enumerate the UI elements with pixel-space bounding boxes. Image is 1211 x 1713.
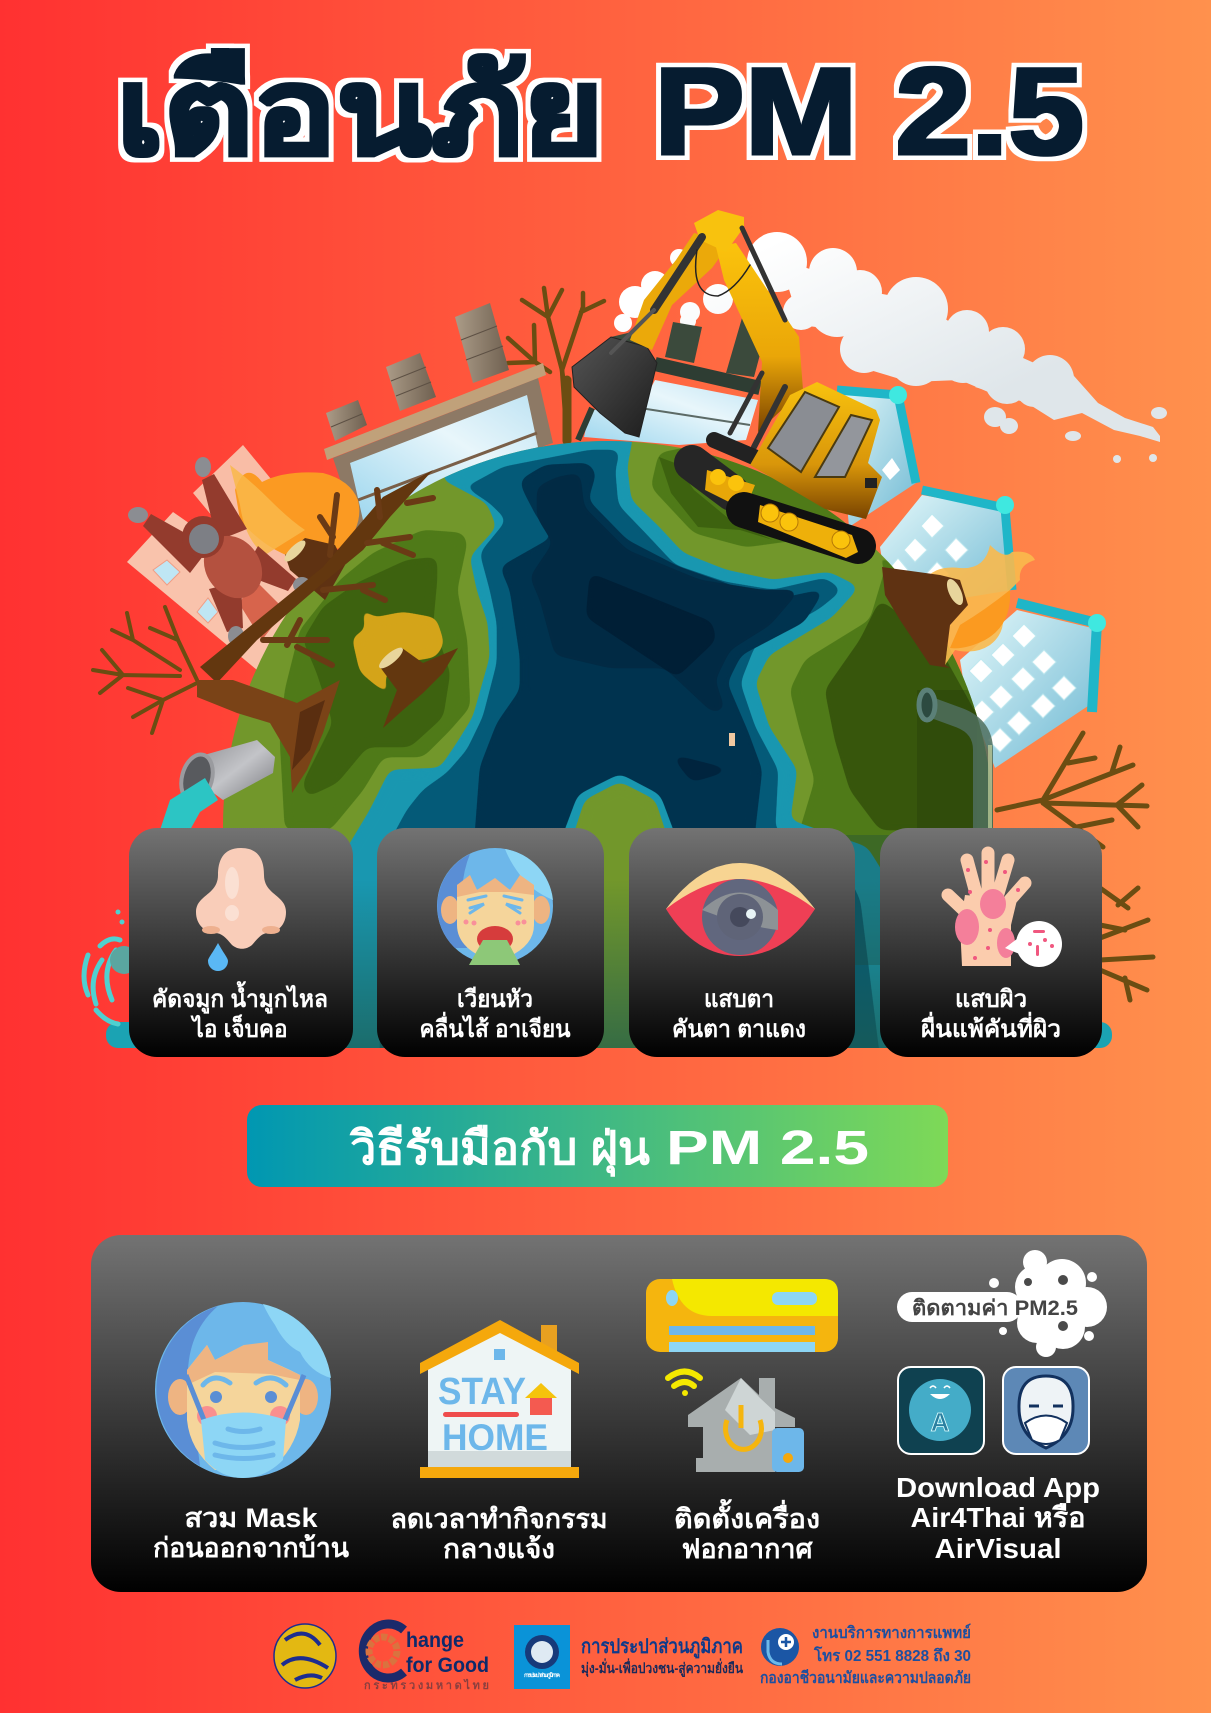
label: download app xyxy=(896,1472,1100,1564)
card: nose xyxy=(129,828,353,1057)
island xyxy=(565,776,673,828)
big stump xyxy=(197,680,340,793)
label: download app: Air4Thai หรือ xyxy=(910,1502,1086,1533)
right land dark xyxy=(826,604,977,830)
stump behind fallen tree xyxy=(282,538,345,600)
pipe right xyxy=(919,690,990,830)
orangutan xyxy=(128,457,311,646)
cab xyxy=(750,382,882,519)
dead tree left xyxy=(93,607,197,733)
logo: Change for Good: for Good xyxy=(406,1654,489,1677)
label: reduce outdoor activity xyxy=(390,1504,608,1564)
text xyxy=(921,986,1061,1043)
panel: protective actions xyxy=(91,1235,1147,1592)
fire: left xyxy=(230,465,359,560)
label: air purifier: ติดตั้งเครื่อง xyxy=(674,1498,820,1534)
sea teal xyxy=(346,441,888,1048)
icon: air conditioner xyxy=(646,1279,838,1352)
text xyxy=(420,986,571,1043)
icon: red eye xyxy=(666,863,815,956)
text: ผื่นแพ้คันที่ผิว xyxy=(921,1011,1061,1043)
small stump xyxy=(376,645,458,728)
label: download app: Download App xyxy=(896,1472,1100,1503)
logo: medical service: งานบริการทางการแพทย์ xyxy=(812,1623,971,1642)
icon: rash hand xyxy=(948,853,1062,967)
text xyxy=(152,980,328,1043)
land base xyxy=(223,441,977,844)
footer logos xyxy=(274,1623,971,1692)
text: ไอ เจ็บคอ xyxy=(190,1014,288,1043)
label: download app: AirVisual xyxy=(934,1533,1062,1564)
text: แสบตา xyxy=(704,986,774,1013)
logo: medical service: โทร 02 551 8828 ถึง 30 xyxy=(813,1645,971,1665)
icon: AirVisual app xyxy=(1003,1367,1089,1454)
logo: PWA: การประปาส่วนภูมิภาค xyxy=(581,1636,743,1660)
icon: smart home air purifier xyxy=(668,1372,804,1472)
text: คลื่นไส้ อาเจียน xyxy=(420,1011,571,1043)
label: mask xyxy=(153,1503,350,1563)
logo: Change for Good: hange xyxy=(406,1629,464,1652)
card: skin xyxy=(880,828,1102,1057)
icon: nose xyxy=(196,848,286,971)
icon: stay home: STAY xyxy=(438,1371,526,1413)
heading: PM 2.5 xyxy=(666,1122,869,1175)
logo: Change for Good xyxy=(363,1624,489,1692)
dead tree top xyxy=(508,288,604,441)
smoke cloud xyxy=(614,232,1167,463)
icon: masked person xyxy=(155,1302,331,1478)
button: how to cope xyxy=(247,1105,948,1187)
label: mask: ก่อนออกจากบ้าน xyxy=(153,1533,350,1563)
factory behind excavator xyxy=(578,318,762,445)
illustration: earth under pollution xyxy=(84,210,1167,1070)
pollution shade xyxy=(346,900,888,1048)
icon: stay home xyxy=(420,1320,579,1478)
building: peach, left xyxy=(127,445,350,670)
logo: provincial seal xyxy=(274,1624,336,1688)
stick xyxy=(630,233,730,350)
fire: right xyxy=(925,545,1035,665)
card: eye xyxy=(629,828,855,1057)
water base xyxy=(84,910,1112,1048)
label: reduce outdoor activity: ลดเวลาทำกิจกรรม xyxy=(390,1504,608,1534)
fallen tree xyxy=(200,470,433,683)
right land mid xyxy=(652,448,977,867)
text: เวียนหัว xyxy=(457,986,533,1013)
flame small stump xyxy=(352,602,444,700)
text: คัดจมูก น้ำมูกไหล xyxy=(152,980,328,1014)
rear track xyxy=(692,463,732,493)
heading: วิธีรับมือกับ ฝุ่น xyxy=(349,1122,651,1177)
logo: Change for Good: กระทรวงมหาดไทย xyxy=(364,1678,489,1692)
heading xyxy=(349,1122,869,1177)
sea deep xyxy=(530,473,800,712)
title: PM 2.5 xyxy=(654,43,1084,181)
label: mask: สวม Mask xyxy=(184,1503,319,1533)
buildings right xyxy=(837,386,1106,768)
title: เตือนภัย xyxy=(116,44,604,180)
title xyxy=(116,43,1084,181)
icon: Air4Thai app xyxy=(898,1367,984,1454)
label: air purifier: ฟอกอากาศ xyxy=(682,1534,813,1564)
hydraulics xyxy=(611,228,785,457)
icon: PM2.5 cloud tag: ติดตามค่า PM2.5 xyxy=(912,1297,1078,1320)
globe xyxy=(223,441,993,1048)
icon: PM2.5 cloud tag xyxy=(897,1250,1107,1357)
text: คันตา ตาแดง xyxy=(672,1016,806,1043)
stump: right xyxy=(882,567,968,668)
boom xyxy=(716,243,803,432)
logo: PWA: การประปาส่วนภูมิภาค xyxy=(524,1671,560,1680)
left land mid xyxy=(280,530,470,830)
label: reduce outdoor activity: กลางแจ้ง xyxy=(443,1534,555,1564)
front track xyxy=(744,510,858,546)
logo: medical service: กองอาชีวอนามัยและความปลอดภัย xyxy=(760,1668,971,1687)
card: vomit xyxy=(377,828,604,1057)
bucket xyxy=(572,337,657,437)
pipe left xyxy=(160,740,275,830)
text: แสบผิว xyxy=(955,986,1027,1013)
text xyxy=(672,986,806,1043)
icon: stay home: HOME xyxy=(442,1417,548,1458)
sea navy xyxy=(475,463,820,828)
dead tree right xyxy=(997,733,1153,1000)
logo: medical service xyxy=(760,1623,971,1687)
sea blue xyxy=(380,450,880,1060)
factory left xyxy=(324,303,553,540)
icon: vomiting person xyxy=(437,848,553,965)
icon: Air4Thai app: A xyxy=(931,1407,950,1437)
label: air purifier xyxy=(674,1498,820,1564)
excavator xyxy=(572,210,882,558)
logo: PWA xyxy=(514,1625,743,1689)
logo: PWA: มุ่ง-มั่น-เพื่อปวงชน-สู่ความยั่งยืน xyxy=(581,1658,743,1677)
left land dark xyxy=(303,557,450,797)
